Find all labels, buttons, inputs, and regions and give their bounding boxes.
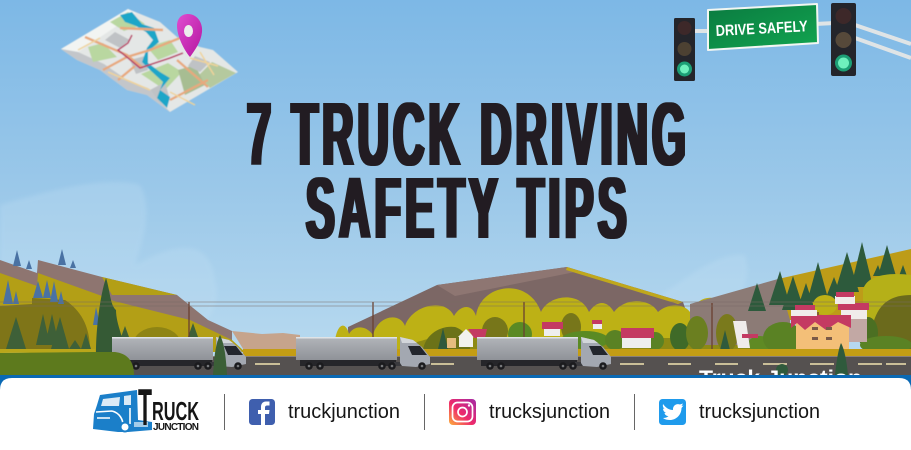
roads [85, 28, 208, 100]
sign: drive safely [708, 4, 818, 50]
house on right [733, 321, 758, 348]
traffic signal gantry [674, 3, 911, 81]
right forested hill [0, 242, 911, 354]
utility poles [189, 302, 818, 350]
logo truck icon [93, 390, 152, 432]
white house, centre [447, 329, 487, 348]
power lines [0, 302, 911, 306]
left traffic light [674, 18, 695, 81]
road [125, 356, 911, 375]
green pines [6, 314, 198, 349]
logo: truck junction: RUCK [152, 396, 199, 426]
left hills [0, 249, 245, 363]
facebook handle: truckjunction [288, 401, 400, 423]
yellow-green bushes [863, 274, 911, 352]
truck 3 [477, 337, 611, 370]
orange village [791, 292, 869, 349]
instagram handle: trucksjunction [489, 401, 610, 423]
blue pines [3, 249, 100, 325]
icon: twitter [659, 399, 686, 425]
tall cypress tree [96, 278, 124, 352]
truck 1 [112, 337, 246, 370]
logo: truck junction: JUNCTION [153, 422, 199, 433]
icon: instagram [449, 399, 476, 425]
footer panel [0, 378, 911, 450]
small houses [542, 320, 654, 338]
logo: truck junction: T [138, 379, 152, 437]
folded map [61, 9, 238, 112]
road shoulder [243, 349, 911, 357]
icon: facebook [249, 399, 275, 425]
sign: drive safely: DRIVE SAFELY [715, 18, 809, 40]
title [247, 85, 690, 257]
logo: truck junction [93, 379, 199, 437]
olive slope [0, 298, 90, 350]
houses [447, 292, 869, 349]
twitter handle: trucksjunction [699, 401, 820, 423]
pine forest [748, 242, 907, 311]
clouds [0, 182, 747, 345]
route [118, 35, 183, 68]
gantry arm [695, 23, 911, 58]
footer blue bar [0, 375, 911, 393]
yellow bushes [335, 288, 790, 350]
map pin [177, 14, 202, 57]
river [120, 12, 170, 108]
cropped road text: Truck Junction [699, 367, 862, 390]
green bushes [605, 314, 911, 354]
facebook handle [249, 399, 400, 425]
twitter handle [659, 399, 820, 425]
map sheet [61, 9, 238, 112]
truck 2 [296, 337, 430, 370]
foreground bushes and trees [0, 335, 848, 376]
distant hills [232, 331, 300, 352]
center mountain [335, 267, 790, 352]
instagram handle [449, 399, 610, 425]
right traffic light [831, 3, 856, 76]
